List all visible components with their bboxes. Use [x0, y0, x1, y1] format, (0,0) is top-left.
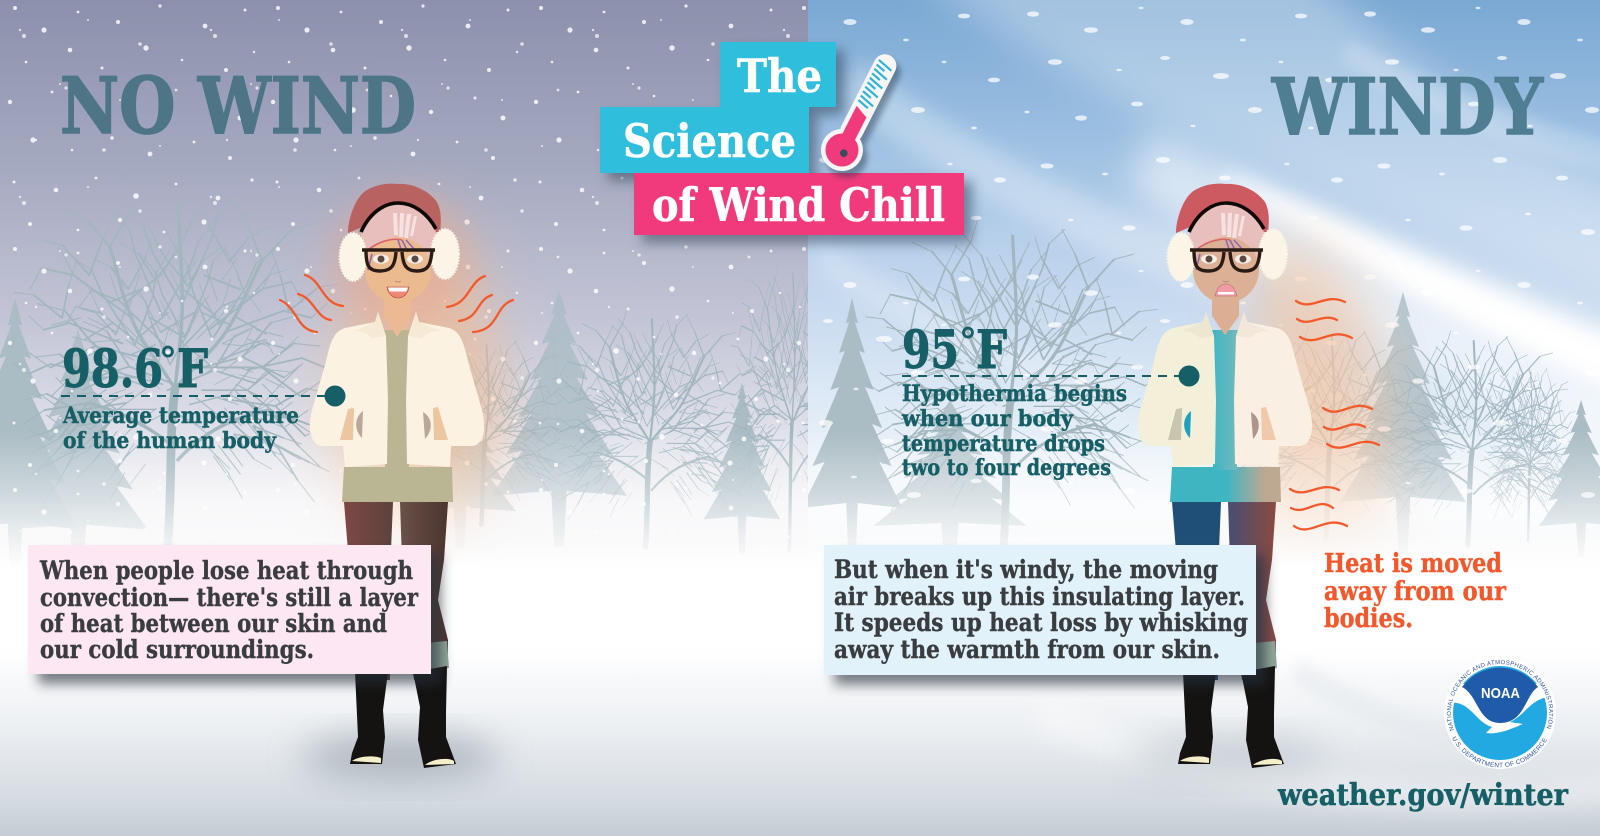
- worried mouth: [1215, 284, 1237, 296]
- skirt hem: [342, 467, 453, 502]
- callout: 95 degrees: when our body: [901, 406, 1074, 432]
- text box: no wind explanation: [28, 545, 441, 684]
- text box: no wind explanation: our cold surroundings.: [40, 635, 314, 664]
- text box: windy explanation: But when it's windy, the moving: [834, 555, 1218, 584]
- shirt: [1212, 330, 1238, 470]
- callout: 95 degrees: F: [976, 320, 1007, 381]
- callout: 98.6 degrees: [61, 339, 346, 454]
- NOAA logo: [1444, 660, 1556, 769]
- heat waves: right figure: [1290, 299, 1379, 529]
- body heat glow: left figure: [327, 196, 498, 590]
- title: of Wind Chill: of Wind Chill: [652, 178, 945, 232]
- NOAA logo: NATIONAL OCEANIC AND ATMOSPHERIC ADMINISTRATION: [1446, 660, 1554, 731]
- figure shadow: left: [300, 735, 500, 779]
- title shadows: [608, 50, 972, 243]
- callout: 98.6 degrees: °: [159, 340, 177, 382]
- head, earmuffs and glasses: [340, 203, 459, 303]
- skirt hem: [1170, 467, 1281, 502]
- callout: 95 degrees: 95: [902, 320, 959, 381]
- title: Science: Science: [623, 114, 796, 168]
- left background: no wind sky: [0, 0, 808, 640]
- hands in pockets: [1168, 407, 1276, 440]
- boots: [1178, 666, 1284, 768]
- text box: windy explanation: away the warmth from our skin.: [834, 635, 1220, 664]
- blowing snow: right: [808, 0, 1600, 540]
- orange note: heat is moved away: away from our: [1324, 577, 1506, 607]
- callout: 95 degrees: two to four degrees: [902, 455, 1111, 481]
- hat: [1176, 184, 1269, 234]
- background trees: right forest: [802, 220, 1600, 560]
- text box: windy explanation: air breaks up this insulating layer.: [834, 582, 1245, 611]
- heat glow: right figure, blown away: [1250, 240, 1385, 585]
- callout: 95 degrees: °: [959, 321, 977, 363]
- character: windy figure: [1138, 184, 1312, 768]
- text box: windy explanation: It speeds up heat loss by whisking: [834, 608, 1248, 637]
- title: The: [720, 42, 836, 107]
- orange note: heat is moved away: Heat is moved: [1324, 549, 1502, 579]
- neck: [1212, 298, 1239, 335]
- NOAA logo: U.S. DEPARTMENT OF COMMERCE: [1452, 736, 1547, 768]
- hands in pockets: [340, 407, 448, 440]
- icon: thermometer: [812, 46, 915, 185]
- jacket: [310, 312, 484, 467]
- text box: windy explanation: [824, 545, 1266, 685]
- head, earmuffs and glasses: [1168, 203, 1287, 303]
- text box: no wind explanation: of heat between our skin and: [40, 609, 387, 638]
- orange note: heat is moved away: bodies.: [1324, 604, 1413, 634]
- legs: [344, 502, 448, 680]
- NOAA logo: NOAA: [1481, 685, 1520, 702]
- callout: 95 degrees: Hypothermia begins: [902, 381, 1127, 407]
- orange note: heat is moved away: [1324, 549, 1506, 634]
- figure shadow: right: [1128, 737, 1328, 777]
- smiling mouth: [387, 287, 409, 298]
- website url: weather.gov/winter: [1277, 778, 1569, 813]
- right background: windy sky with streaks: [808, 0, 1600, 490]
- text box: no wind explanation: convection— there's still a layer: [40, 583, 419, 612]
- callout: 95 degrees: temperature drops: [902, 431, 1105, 457]
- background trees: left forest: [0, 187, 808, 552]
- shirt: [384, 330, 410, 470]
- heading: no wind: NO WIND: [60, 61, 416, 152]
- title: Science: [600, 107, 809, 173]
- callout: 98.6 degrees: F: [177, 339, 208, 400]
- callout: 98.6 degrees: of the human body: [63, 428, 277, 454]
- title: The: The: [737, 49, 822, 103]
- heading: windy: WINDY: [1271, 62, 1544, 153]
- callout: 98.6 degrees: Average temperature: [62, 403, 299, 429]
- title block: [600, 42, 972, 243]
- callout: 95 degrees: [901, 320, 1200, 481]
- leg warmer: [425, 641, 449, 670]
- jacket: [1138, 312, 1312, 467]
- legs: [1172, 502, 1276, 680]
- falling snow: left: [0, 0, 808, 540]
- leg warmer: [1253, 641, 1277, 670]
- character: no wind figure: [310, 184, 484, 768]
- neck: [384, 298, 411, 337]
- callout: 98.6 degrees: 98.6: [62, 339, 163, 400]
- hat: [348, 184, 441, 234]
- boots: [350, 666, 456, 768]
- ground fog and snowfield: [0, 430, 1600, 836]
- heat waves: left figure: [280, 275, 513, 332]
- text box: no wind explanation: When people lose heat through: [39, 556, 413, 585]
